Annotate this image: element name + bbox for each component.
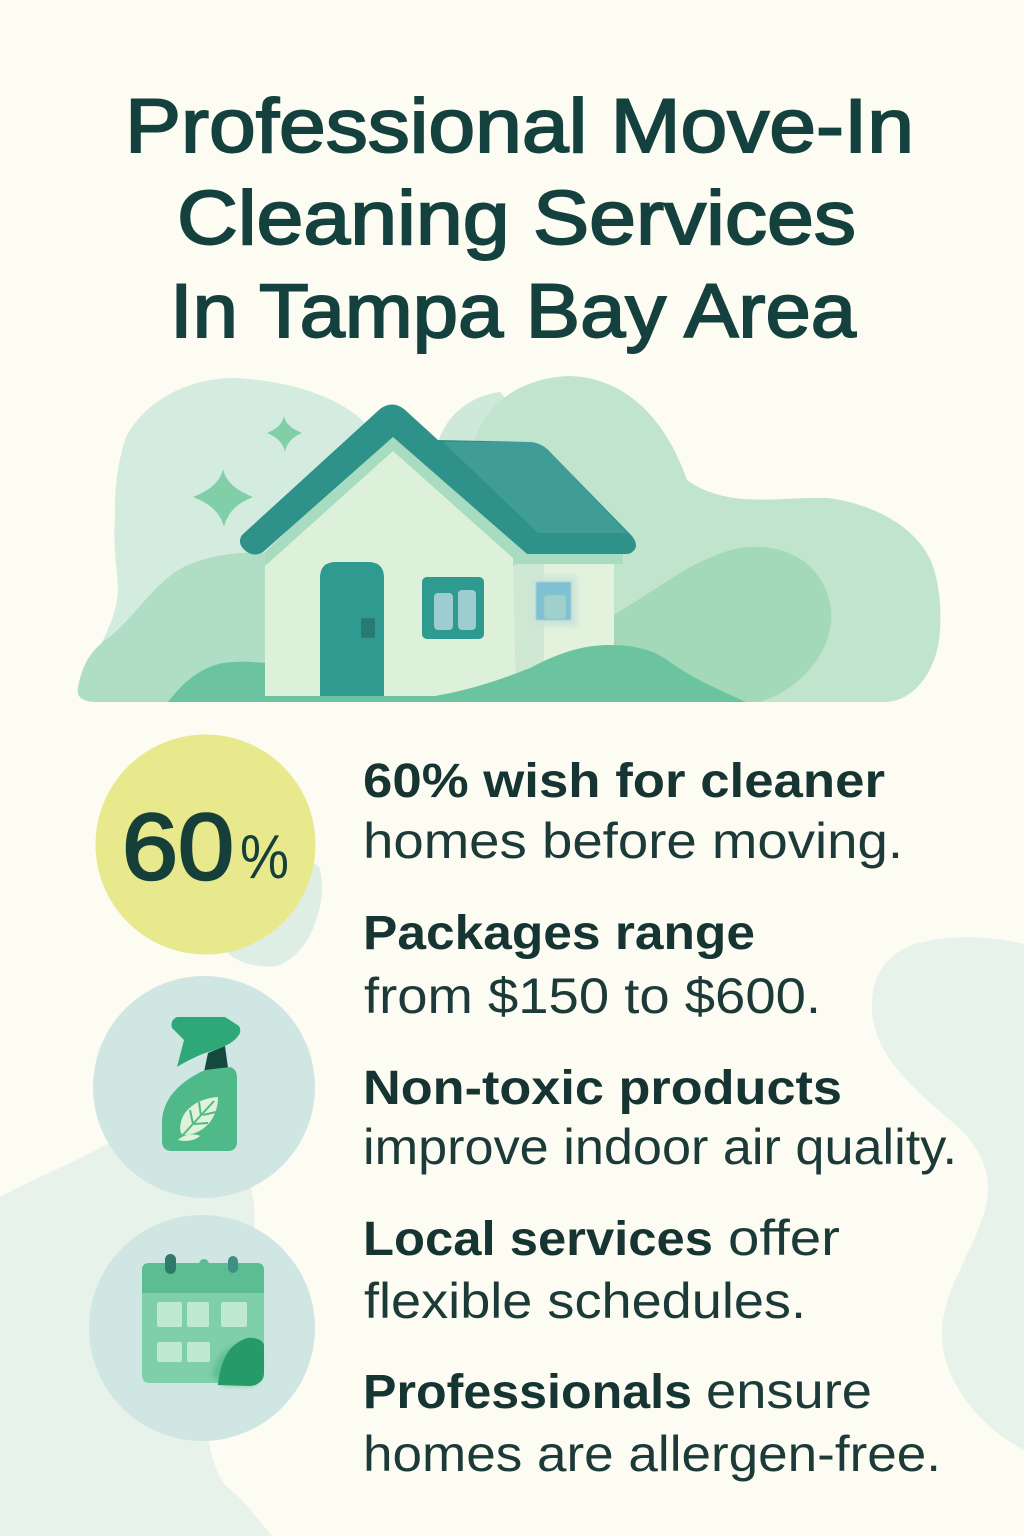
sparkle small: [267, 416, 302, 452]
calendar body: [142, 1263, 264, 1383]
text: professionals: ensure: [706, 1363, 872, 1419]
front window: [422, 577, 484, 639]
roof: [240, 404, 636, 554]
text: local services: [363, 1210, 840, 1329]
text: local services: Local services: [363, 1213, 713, 1266]
text: 60% wish: [363, 755, 903, 869]
title: [125, 84, 914, 354]
text: non-toxic: [363, 1062, 957, 1175]
title: Cleaning Services: [177, 176, 856, 261]
background blob: bottom left: [0, 1138, 272, 1536]
right backdrop: [400, 376, 940, 702]
front hill left: [168, 662, 265, 702]
title: Professional Move-In: [125, 84, 914, 169]
stat badge: 60%: 60: [122, 794, 234, 899]
calendar cells: [157, 1302, 247, 1362]
text: local services: offer: [728, 1210, 840, 1266]
background blob: right: [872, 937, 1024, 1450]
left mid hill: [78, 553, 300, 702]
door handle: [361, 618, 375, 638]
text: packages: [363, 907, 821, 1024]
text: packages: Packages range: [363, 907, 755, 960]
title: In Tampa Bay Area: [170, 269, 857, 354]
bottle body: [162, 1067, 237, 1151]
sparkle large: [193, 469, 253, 527]
stat badge: 60%: [96, 734, 316, 954]
side wall: [513, 556, 614, 696]
bottle neck: [204, 1046, 228, 1072]
text: 60% wish: 60% wish for cleaner: [363, 755, 885, 808]
text: local services: flexible schedules.: [364, 1273, 806, 1329]
leaf: [178, 1097, 218, 1141]
calendar rings: [165, 1254, 176, 1274]
text: packages: from $150 to $600.: [364, 968, 821, 1024]
icon: calendar: [89, 1215, 315, 1441]
side window: [530, 576, 577, 626]
icon: spray bottle: [93, 976, 315, 1198]
front hill main: [265, 645, 746, 702]
roof right plane: [443, 442, 627, 533]
text: professionals: [363, 1363, 941, 1482]
text: non-toxic: Non-toxic products: [363, 1062, 842, 1115]
light left backdrop: [86, 378, 400, 690]
text: professionals: Professionals: [363, 1366, 692, 1419]
calendar leaf mark: [212, 1338, 264, 1386]
text: non-toxic: improve indoor air quality.: [363, 1119, 957, 1175]
door: [320, 562, 384, 696]
calendar header: [142, 1263, 264, 1293]
spray head: [172, 1017, 240, 1067]
text: 60% wish: homes before moving.: [363, 813, 903, 869]
front wall: [265, 430, 528, 696]
text: professionals: homes are allergen-free.: [363, 1426, 941, 1482]
house illustration: [78, 376, 940, 702]
stat badge: 60%: %: [240, 823, 289, 892]
right mid hill: [600, 547, 831, 702]
right backdrop light lobe: [435, 392, 540, 560]
stat shadow blob: [225, 863, 322, 966]
